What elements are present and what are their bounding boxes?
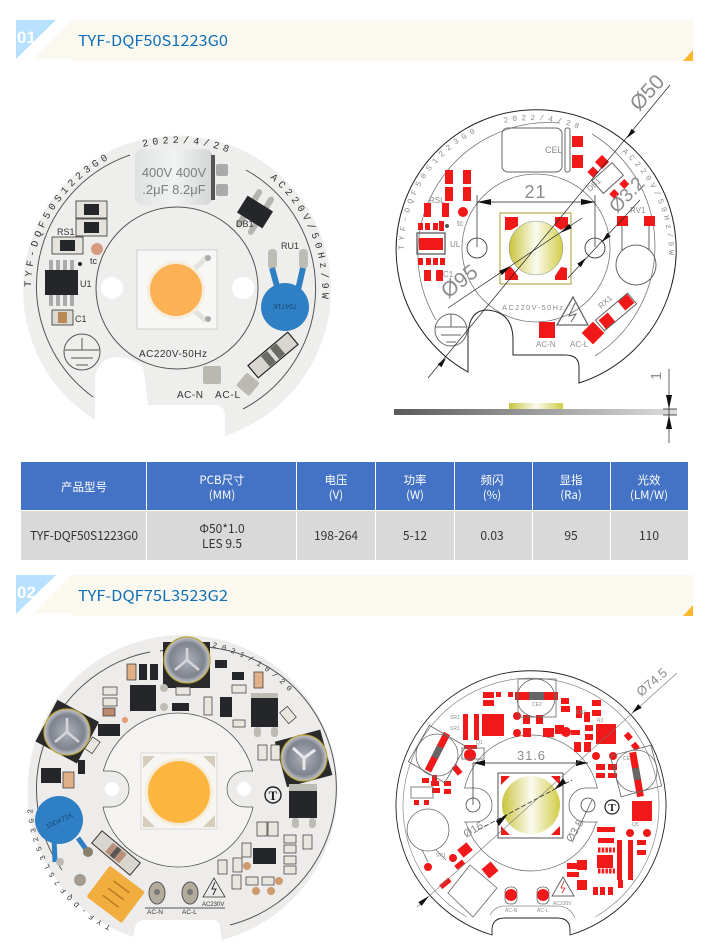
photo: PCB board 2 (27, 635, 338, 940)
dimension 31.6: 31.6 (517, 748, 545, 763)
body values: 95 (564, 527, 578, 544)
curved labels: AC220V/50Hz/9W (622, 150, 674, 255)
component labels: AC-N (536, 340, 556, 349)
component labels: C1 (443, 270, 454, 279)
component labels: CEL (545, 145, 563, 155)
section header 02: 02 (17, 583, 36, 602)
component labels: VR1 (436, 853, 446, 859)
table header row (21, 462, 688, 510)
curved silkscreen text: 2022/4/28 (142, 136, 229, 152)
body values: TYF-DQF50S1223G0 (30, 527, 138, 544)
body values: 5-12 (403, 527, 427, 544)
AC pads (177, 366, 260, 401)
black power ICs (41, 660, 317, 864)
AC pads: AC-N (147, 909, 163, 916)
chip U1 (45, 260, 92, 306)
bridge DB1: DB1 (236, 219, 254, 229)
LED module (137, 250, 217, 329)
curved labels: TYF-DQF50S1223G0 (398, 128, 474, 250)
bridge DB1 (231, 185, 279, 239)
dimension phi 3.2 (568, 173, 649, 278)
technical drawing 1 (394, 70, 677, 443)
header labels: (Ra) (560, 487, 582, 503)
body values (30, 520, 659, 552)
dimension phi 50: Ø50 (626, 70, 669, 115)
component labels: Q5 (632, 822, 639, 828)
AC pads (147, 882, 198, 916)
inner rings (403, 678, 659, 918)
header labels: (MM) (209, 487, 235, 503)
component labels: CE2 (532, 702, 542, 708)
electrolytic capacitor: 400V 400V (142, 165, 206, 180)
header labels: 功率 (404, 472, 426, 488)
dimension phi 16: Ø16 (462, 820, 486, 841)
curved silkscreen text: AC220V/50Hz/9W (270, 174, 329, 299)
yellow film capacitor (86, 866, 145, 923)
logo (605, 800, 619, 814)
section header 01 (16, 20, 693, 61)
varistor RU1 (261, 241, 309, 331)
component labels: SR1 (450, 715, 460, 721)
curved labels: 2022/4/28 (504, 114, 579, 128)
component labels (436, 702, 639, 914)
silkscreen rings (36, 155, 316, 409)
tc test point (90, 243, 103, 266)
capacitor right (275, 730, 332, 787)
dimension 31.6 (473, 748, 588, 805)
pin leads (160, 684, 317, 828)
header labels: (LM/W) (630, 487, 668, 503)
RX resistor (92, 831, 140, 875)
outlined components (417, 128, 656, 346)
ground symbol (64, 334, 100, 370)
component labels: RX1 (597, 293, 615, 311)
header labels: (W) (406, 487, 424, 503)
dimension phi 9.5 (437, 218, 582, 308)
chip U1: U1 (80, 279, 92, 289)
curved silkscreen text (27, 642, 292, 930)
electrolytic capacitor: .2μF 8.2μF (142, 182, 206, 197)
header labels: 频闪 (480, 472, 504, 488)
component labels: RSL (429, 196, 445, 205)
component labels: Q1 (476, 740, 483, 746)
header labels: 光效 (638, 472, 661, 488)
red component pads (418, 136, 655, 344)
dimension phi 3.2: Ø3.2 (605, 173, 649, 217)
warning triangle (202, 878, 225, 908)
body values: LES 9.5 (202, 535, 242, 552)
component labels (429, 145, 646, 349)
logo (265, 787, 281, 803)
dimension phi 74.5 (417, 665, 677, 907)
dimension phi 3.8: Ø3.8 (564, 818, 587, 844)
varistor RU1: RU1 (281, 241, 299, 251)
component labels: tc (457, 219, 463, 228)
spec table (21, 462, 688, 560)
resistors (52, 201, 107, 254)
section header 02: TYF-DQF75L3523G2 (78, 585, 228, 606)
dark middle bands on capacitors (432, 692, 641, 780)
curved silkscreen text: 2021/10/20 (212, 642, 292, 690)
component labels: RV1 (630, 206, 646, 215)
outlined components (407, 679, 662, 917)
dimension phi 3.8 (564, 800, 592, 844)
section header 01: TYF-DQF50S1223G0 (78, 30, 228, 51)
component labels: AC220V-50Hz (502, 303, 563, 312)
component labels: SR1 (450, 726, 460, 732)
curved silkscreen text (24, 136, 329, 299)
component labels: R2 (597, 718, 604, 724)
capacitor C1 (52, 310, 87, 325)
LED square (498, 773, 563, 838)
logo: T (608, 802, 616, 814)
body values: 198-264 (314, 527, 358, 544)
photo: PCB board 1: AC220V-50Hz (139, 349, 207, 360)
header labels: 显指 (560, 472, 582, 488)
body values: Φ50*1.0 (199, 520, 245, 537)
header labels (61, 472, 668, 503)
technical drawing 2 (396, 665, 677, 935)
electrolytic capacitor (135, 149, 228, 205)
small red pad strips (598, 850, 615, 871)
LED module (141, 753, 217, 829)
header labels: PCB尺寸 (199, 472, 245, 488)
component labels: AC-N (505, 908, 518, 914)
dimension phi 9.5: Ø95 (437, 260, 482, 303)
varistor (35, 796, 93, 866)
brown capacitors bottom (243, 862, 283, 895)
curved silkscreen text: TYF-DQF50S1223G0 (24, 154, 107, 286)
curved silkscreen text: TYF-DQF75L3523G2 (27, 809, 110, 930)
rings (418, 123, 655, 356)
capacitor top (163, 637, 210, 688)
component labels: CE (623, 756, 631, 762)
component labels: UL (450, 240, 461, 249)
dimension phi 50 (428, 70, 670, 378)
varistor RU1: 70471K (273, 302, 297, 309)
silkscreen circuit lines (37, 647, 336, 925)
table body row (21, 511, 688, 560)
dimension phi 16 (462, 778, 572, 841)
photo: PCB board 1 (23, 136, 331, 436)
component labels: AC-L (537, 908, 549, 914)
header labels: (%) (483, 487, 501, 503)
varistor: 10D471K (45, 812, 75, 831)
dimension 21 (477, 182, 595, 247)
body values: 110 (639, 527, 659, 544)
tc point (122, 717, 128, 723)
dimension 21: 21 (524, 182, 546, 202)
component labels: AC230V (553, 901, 572, 907)
section header 02 (16, 575, 693, 616)
header labels: (V) (329, 487, 343, 503)
red component pads (414, 692, 652, 901)
tc test point: tc (90, 256, 98, 266)
section header 01: 01 (17, 28, 36, 47)
capacitor left (35, 700, 99, 763)
body values: 0.03 (480, 527, 504, 544)
central aluminium zone (100, 713, 258, 867)
header labels: 产品型号 (61, 479, 107, 495)
small SMD resistors and capacitors (63, 664, 312, 889)
warning triangle: AC230V (202, 902, 224, 908)
LED square (500, 213, 571, 284)
resistors: RS1 (57, 227, 75, 237)
component labels: CN2 (576, 710, 586, 716)
mounting holes (101, 277, 254, 299)
side view strip: 1 (648, 372, 665, 380)
header labels: 电压 (324, 472, 348, 488)
curved labels (398, 114, 674, 255)
mount bosses (461, 788, 601, 822)
component labels: DB1 (585, 176, 603, 193)
AC pads: AC-N (177, 390, 203, 401)
component labels: AC-L (570, 340, 589, 349)
side view strip (394, 369, 677, 443)
AC pads: AC-L (215, 390, 240, 401)
resistor RX1 (248, 332, 298, 378)
AC pads: AC-L (182, 909, 197, 916)
capacitor C1: C1 (75, 314, 87, 324)
dimension phi 74.5: Ø74.5 (633, 665, 670, 699)
logo: T (269, 788, 278, 803)
